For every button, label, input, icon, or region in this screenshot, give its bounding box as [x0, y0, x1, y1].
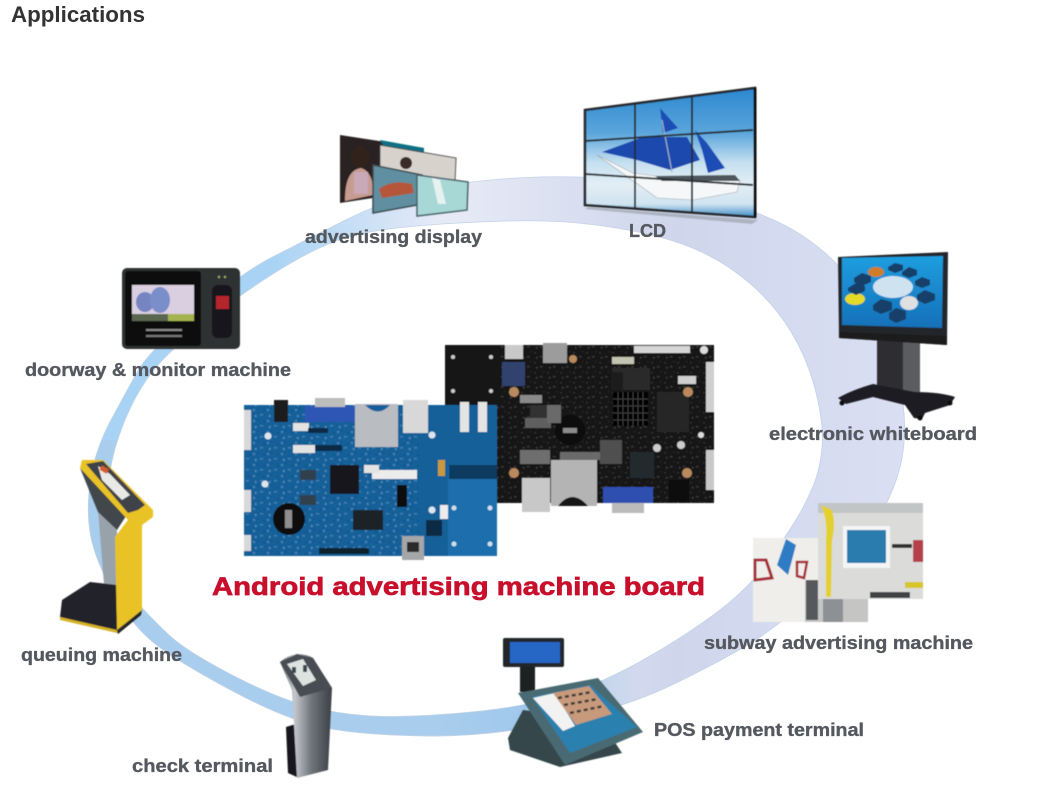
black board — [445, 343, 714, 513]
board caption: Android advertising machine board — [212, 573, 705, 601]
ring band connecting applications — [88, 176, 905, 736]
label: POS payment terminal: POS payment terminal — [654, 719, 864, 740]
label: LCD: LCD — [629, 220, 666, 241]
device: check terminal — [280, 654, 332, 778]
sails — [602, 137, 700, 170]
device: POS payment terminal — [503, 638, 643, 767]
label: advertising display: advertising display — [305, 226, 483, 247]
central boards — [244, 343, 714, 560]
label: queuing machine: queuing machine — [21, 644, 182, 665]
label: subway advertising machine: subway advertising machine — [704, 632, 973, 653]
device: subway advertising machine — [753, 503, 923, 622]
label: electronic whiteboard: electronic whiteboard — [769, 423, 977, 444]
title: Applications — [11, 2, 145, 27]
device: queuing machine — [60, 460, 153, 634]
label: check terminal: check terminal — [132, 755, 273, 776]
device: advertising display — [340, 135, 468, 216]
device: doorway and monitor machine — [122, 268, 240, 349]
device: electronic whiteboard — [838, 252, 955, 420]
device: LCD video wall — [585, 88, 758, 224]
label: doorway and monitor machine: doorway & monitor machine — [25, 359, 291, 380]
blue board — [244, 398, 497, 560]
boat hull — [597, 155, 740, 200]
